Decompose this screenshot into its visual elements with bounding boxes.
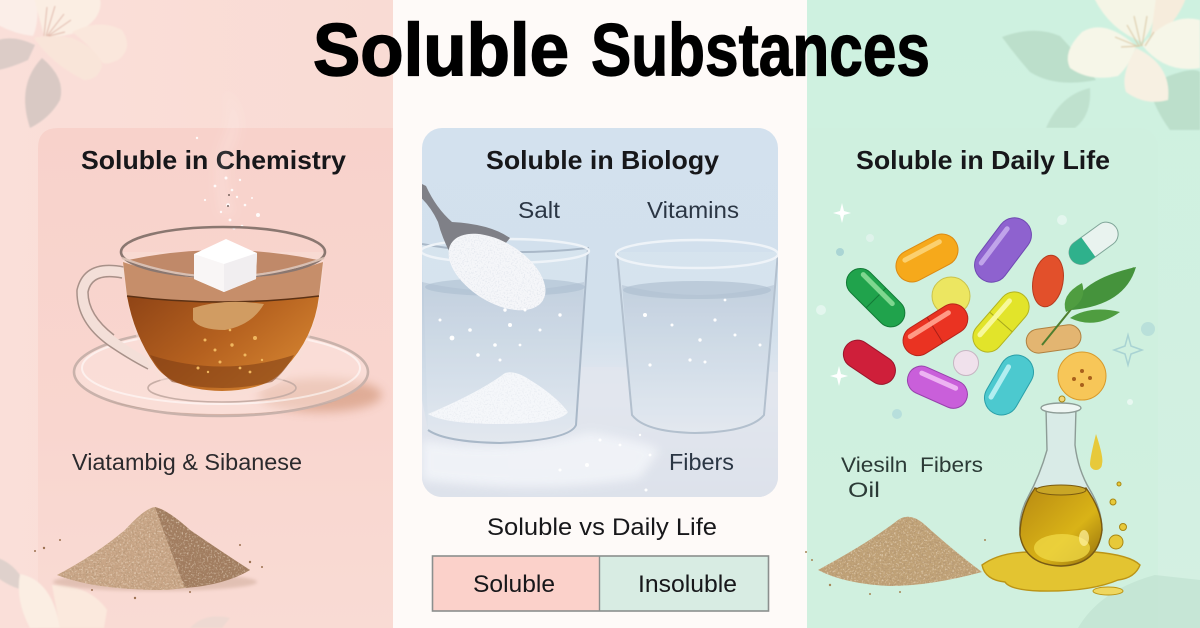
text: daily life label: Oil [848, 479, 880, 502]
icon: white round tablet [954, 350, 978, 376]
icon: orange capsule [890, 228, 964, 288]
decoration: top-left flower [0, 0, 127, 128]
decoration: bottom-left flower [0, 558, 230, 628]
icon: dissolving sugar [193, 302, 264, 330]
text: fibers label: Fibers [669, 449, 734, 475]
decoration: top-right flower [1002, 0, 1200, 130]
icon: glass saucer [74, 328, 368, 416]
text: chemistry label: Viatambig & Sibanese [72, 449, 302, 475]
heading: chemistry: Soluble in Chemistry [81, 145, 347, 175]
table surface [422, 456, 778, 497]
icon: tan capsule [1025, 323, 1083, 355]
icon: crimson tablet [838, 335, 901, 390]
icon: oil droplet on ground [1093, 587, 1123, 595]
text: salt label: Salt [518, 197, 561, 223]
left glass [421, 239, 589, 443]
icon: glass cup with tea [121, 227, 325, 396]
text: comparison heading: Soluble vs Daily Life [487, 514, 717, 541]
panel: Soluble in Daily Life [805, 145, 1155, 595]
icon: yellow round tablet [932, 277, 970, 315]
icon: sparkles and dots [816, 203, 1155, 419]
salt mound in glass [428, 372, 568, 424]
cell: insoluble [600, 556, 768, 611]
icon: cup shadow [258, 378, 382, 412]
icon: glass flask with oil [1020, 403, 1102, 566]
table: soluble vs insoluble [432, 556, 768, 611]
cell: soluble [432, 556, 600, 611]
icon: oil drops [1059, 396, 1126, 549]
icon: green leaf sprig [1042, 267, 1136, 345]
heading: biology: Soluble in Biology [486, 145, 720, 175]
title [313, 8, 930, 92]
card background [422, 128, 778, 497]
icon: falling sugar sparkle [196, 90, 260, 230]
title: Soluble [313, 8, 569, 92]
icon: red capsule [897, 298, 973, 361]
icon: yellow capsule [967, 286, 1035, 358]
background: green right column [807, 0, 1200, 628]
icon: sugar cube [194, 239, 257, 292]
background: pink left column [0, 0, 393, 628]
heading: daily life: Soluble in Daily Life [856, 145, 1110, 175]
icon: white and green capsule [1064, 217, 1123, 269]
title: Substances [591, 8, 930, 92]
right glass [616, 240, 778, 433]
text: soluble: Soluble [473, 571, 555, 598]
panel: chemistry background [38, 128, 393, 628]
spilled salt [422, 432, 660, 487]
icon: red-brown tablet [1029, 253, 1067, 309]
table border [432, 556, 768, 611]
spoon [422, 184, 546, 310]
panel: Soluble in Chemistry [34, 90, 382, 599]
salt particles [438, 299, 762, 492]
text: daily life label: Viesiln Fibers [841, 454, 983, 477]
icon: magenta capsule [903, 362, 972, 413]
background: light centre column [393, 0, 807, 628]
icon: cup handle [82, 270, 148, 364]
icon: brown sugar pile [34, 500, 263, 599]
panel: daily life background [807, 128, 1158, 628]
text: vitamins label: Vitamins [647, 197, 739, 223]
icon: fiber pile [805, 510, 986, 595]
icon: green capsule [841, 263, 911, 333]
panel: Soluble in Biology [418, 128, 778, 497]
icon: purple capsule [968, 211, 1038, 289]
icon: orange round tablet [1058, 352, 1106, 400]
icon: bubbles in tea [196, 329, 263, 373]
icon: oil puddle [982, 552, 1140, 591]
text: daily life label [841, 454, 983, 502]
decoration: bottom-right leaf [1078, 575, 1200, 628]
text: insoluble: Insoluble [638, 571, 737, 598]
icon: cyan capsule [978, 349, 1040, 421]
icon: cup handle edge [77, 265, 148, 369]
